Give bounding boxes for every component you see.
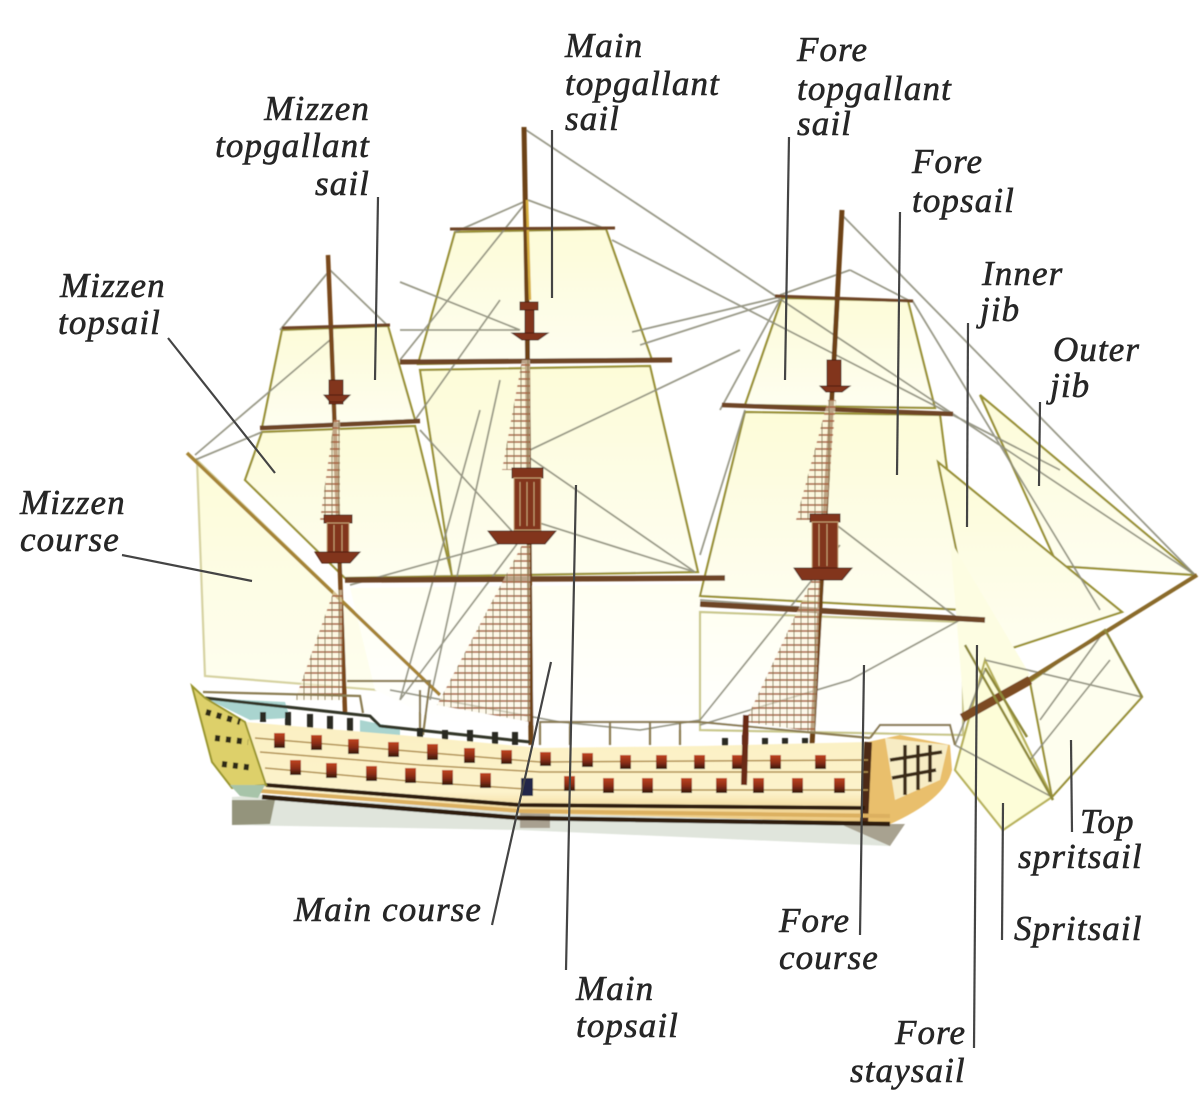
label: mizzen course: course [20,520,120,559]
sail: mizzen course [197,460,440,695]
leader: fore course [860,665,864,935]
label: fore topsail: topsail [912,181,1015,220]
fore tops [810,514,840,522]
leader: fore staysail [974,645,977,1048]
label: fore course: Fore [778,901,850,940]
label: fore topgallant sail [796,30,952,143]
yards [260,228,985,620]
label: mizzen topgallant sail [215,89,370,203]
sail: fore staysail [950,540,1030,722]
mast tops [315,302,852,580]
blue deck strip [205,698,290,720]
sail: mizzen topgallant [262,326,415,428]
sail: mizzen topsail [245,426,452,578]
label: fore topgallant sail: sail [797,104,852,143]
keel and underwater shadow [232,795,902,846]
label: fore staysail [850,1013,966,1090]
fore mast [812,210,842,745]
gun ports lower row [290,760,845,796]
main mast [524,127,531,745]
label: fore topgallant sail: Fore [796,30,868,69]
label: main topsail [575,969,679,1045]
mizzen tops [324,515,352,523]
stern gallery [192,686,266,788]
label: fore course [778,901,879,977]
leader: spritsail [1002,803,1003,940]
label: main topgallant sail [564,26,720,138]
label: inner jib: jib [976,290,1020,329]
hull planks [245,722,868,822]
main tops [512,468,543,478]
sail: fore topgallant [745,298,935,408]
leader: main topsail [566,485,576,970]
sail: fore topsail [700,412,965,610]
label: fore course: course [779,938,879,977]
leader: mizzen course [122,555,252,581]
sail: main topsail [420,366,698,576]
shrouds with ratlines [295,360,836,732]
leader: main topgallant [551,130,553,298]
leader lines [122,130,1072,1048]
label: outer jib: Outer [1053,330,1140,369]
gaff [187,453,440,695]
label: main topsail: topsail [576,1006,679,1045]
label: fore staysail: Fore [894,1013,966,1052]
label: main topsail: Main [575,969,654,1008]
label: fore staysail: staysail [850,1051,966,1090]
label: main course: Main course [293,890,482,929]
spritsail yards [965,630,1142,800]
label: outer jib [1046,330,1140,405]
sail: main topgallant [418,229,652,364]
leader: mizzen topgallant [375,197,378,380]
leader: top spritsail [1071,740,1072,832]
panel: sails [197,229,1195,830]
label: inner jib [976,254,1063,329]
bow framing [885,738,948,800]
label: top spritsail: spritsail [1018,837,1143,876]
leader: mizzen topsail [168,338,275,473]
label: mizzen course: Mizzen [19,483,126,522]
label: fore topgallant sail: topgallant [797,69,952,108]
bow [866,735,952,825]
mizzen mast [328,255,345,712]
label: fore topsail: Fore [911,142,983,181]
leader: inner jib [967,323,968,527]
label: inner jib: Inner [981,254,1063,293]
label: outer jib: jib [1046,366,1090,405]
wales and planks [250,738,890,824]
sail: fore course [700,612,963,735]
leader: fore topsail [897,212,900,475]
label: mizzen topgallant sail: topgallant [215,126,370,165]
sail: inner jib [938,462,1122,652]
label: mizzen topsail: Mizzen [59,266,166,305]
label: mizzen course [19,483,126,559]
hull [192,681,955,846]
gun ports upper row [274,733,826,769]
ship artwork [187,127,1197,846]
label: mizzen topsail: topsail [58,303,161,342]
sail: main course [350,584,700,730]
leader: outer jib [1039,402,1040,486]
label: top spritsail [1018,802,1143,876]
sail: spritsail [955,660,1052,830]
label: main topgallant sail: sail [565,99,620,138]
label: spritsail: Spritsail [1014,909,1143,948]
spars and masts [187,127,1197,800]
label: main topgallant sail: Main [564,26,643,65]
label: mizzen topgallant sail: Mizzen [263,89,370,128]
upper deck railings [203,681,955,745]
label: fore topsail [911,142,1015,220]
label: main topgallant sail: topgallant [565,64,720,103]
deck figures [263,712,805,752]
fore channel rigging [744,715,746,785]
leader: main course [492,662,551,925]
rigging lines [195,130,1195,797]
sail: top spritsail [1030,630,1142,797]
leader: fore topgallant [785,137,789,380]
bowsprit [1025,575,1197,682]
sail: outer jib [980,395,1195,575]
label: mizzen topgallant sail: sail [315,164,370,203]
label: top spritsail: Top [1080,802,1135,841]
label: mizzen topsail [58,266,166,342]
